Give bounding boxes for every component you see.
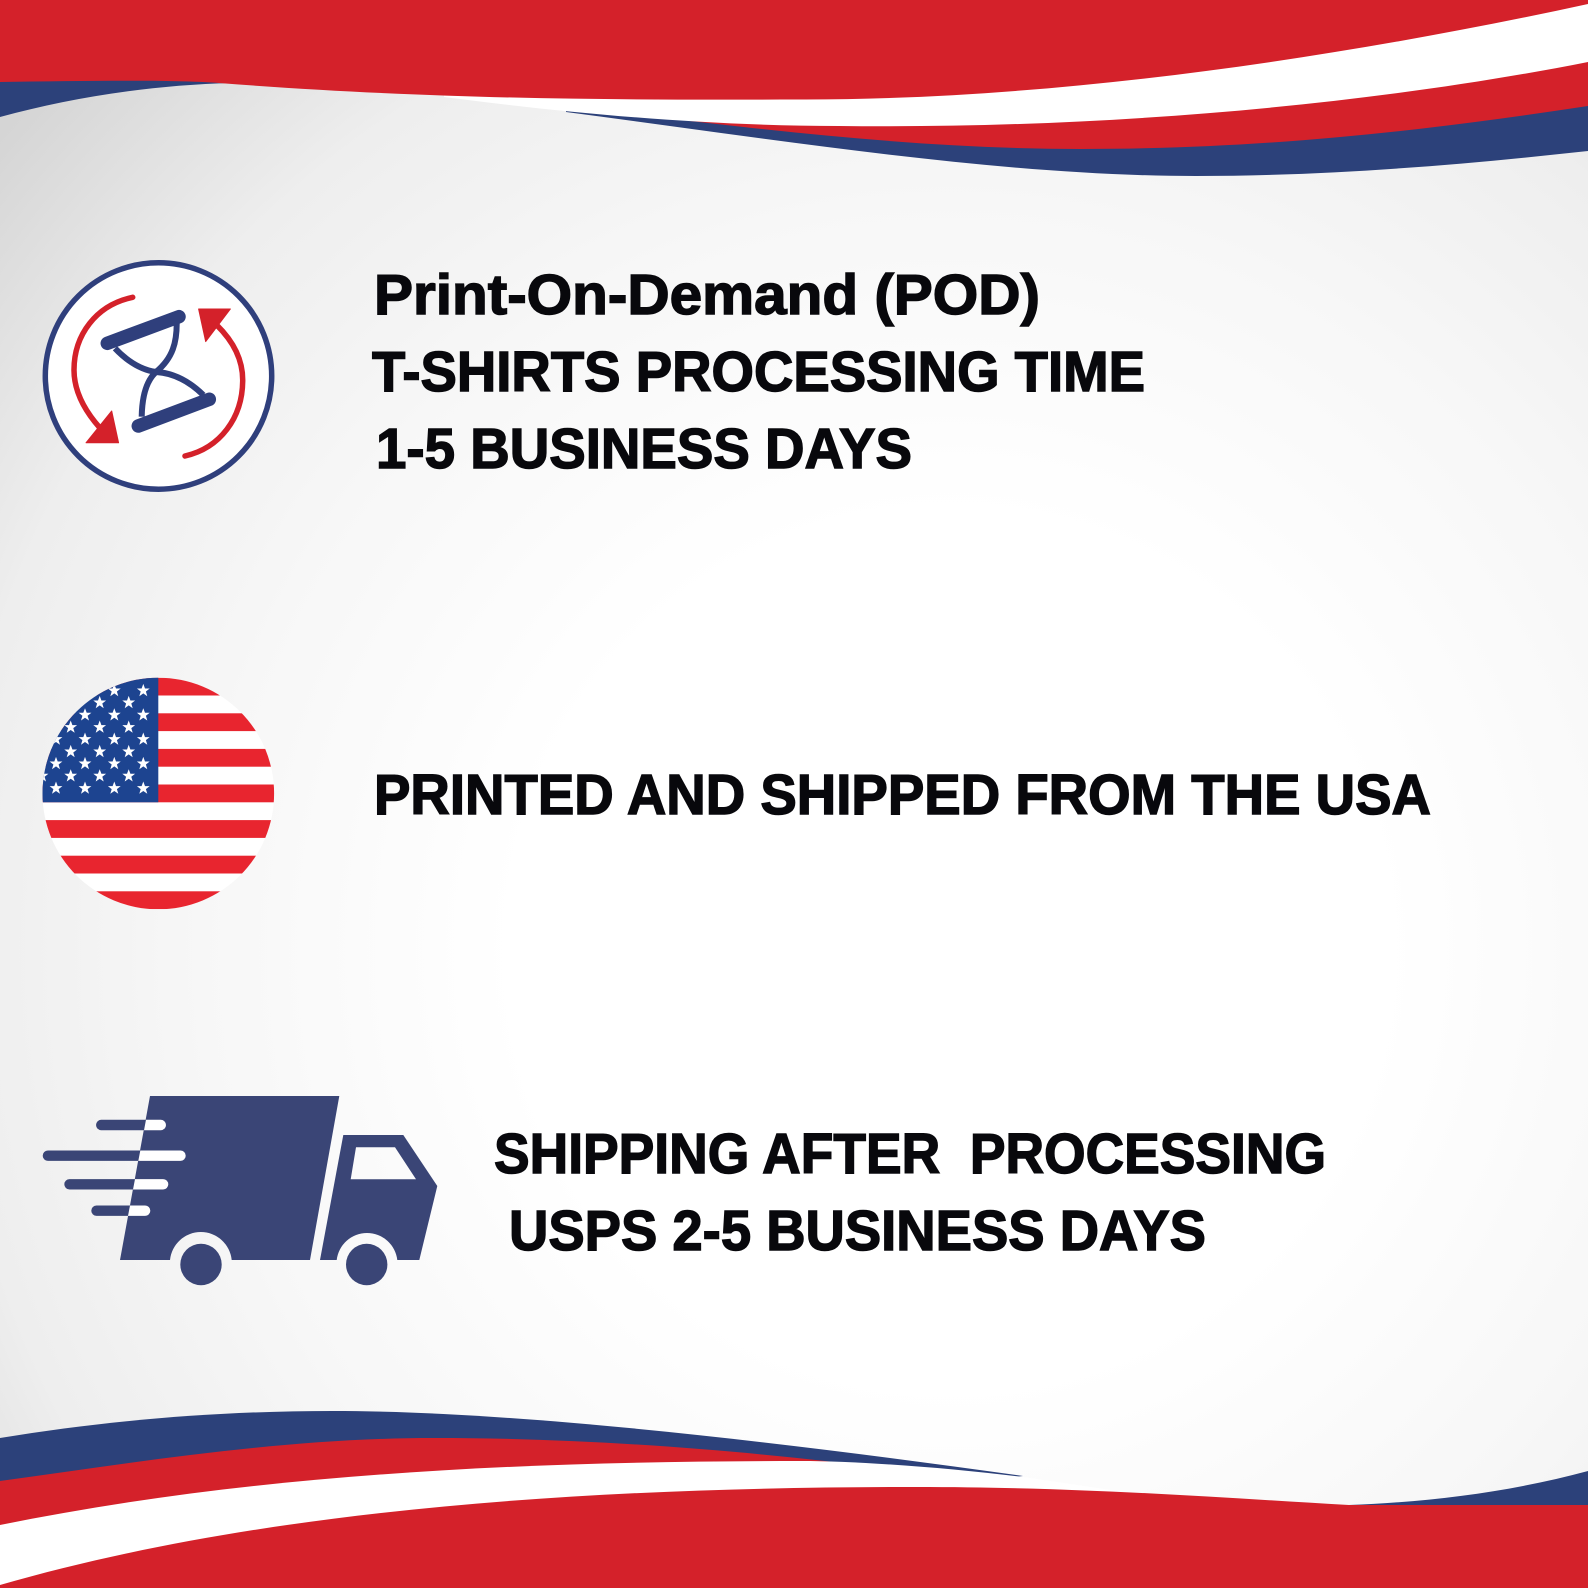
text block: processing time: T-SHIRTS PROCESSING TIME — [372, 341, 1145, 404]
text block: printed and shipped: PRINTED AND SHIPPED FROM THE USA — [374, 764, 1431, 827]
text block: shipping time — [494, 1123, 1326, 1263]
icon: american flag circle — [36, 675, 280, 915]
icon: hourglass with rotating arrows — [45, 263, 272, 489]
text block: processing time: Print-On-Demand (POD) — [374, 264, 1040, 327]
top patriotic wave banner — [0, 0, 1588, 176]
icon: delivery truck — [43, 1096, 437, 1285]
text block: shipping time: SHIPPING AFTER PROCESSING — [494, 1123, 1326, 1186]
text block: shipping time: USPS 2-5 BUSINESS DAYS — [509, 1200, 1206, 1263]
text block: processing time — [372, 264, 1145, 481]
bottom patriotic wave banner — [0, 1411, 1588, 1588]
text block: processing time: 1-5 BUSINESS DAYS — [376, 418, 912, 481]
